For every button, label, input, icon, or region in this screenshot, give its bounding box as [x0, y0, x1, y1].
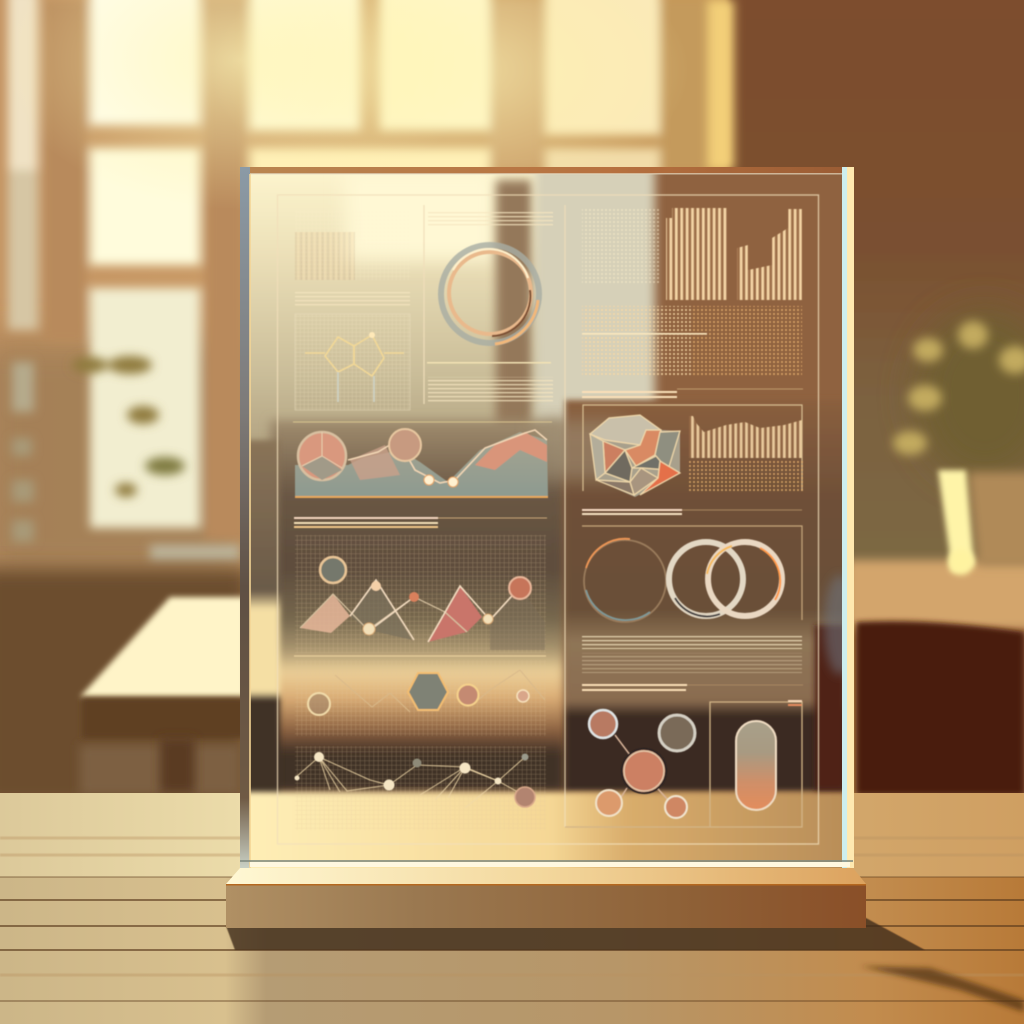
ring: thin outline [584, 540, 666, 622]
inner outline and column divider [278, 195, 818, 844]
right lower: molecule nodes [589, 710, 695, 818]
right top: wide dotted band [582, 306, 802, 376]
left middle: heading lines [294, 517, 547, 528]
right lower: pill card [565, 700, 802, 827]
potted plant on right [893, 310, 1024, 575]
left middle: lower grid panel with shapes [294, 656, 546, 736]
chart circle middle [389, 429, 421, 461]
right top: dotted block [582, 209, 660, 285]
background plant behind left window [12, 356, 240, 561]
left top: ring [441, 245, 539, 344]
left table in background [80, 597, 247, 793]
left: area chart with circles [293, 422, 552, 497]
right middle: polyhedron gem card [583, 405, 802, 497]
background: blurred room with window [0, 0, 1024, 808]
left top: text-line blocks [427, 210, 553, 403]
stand shadow on table [226, 918, 1024, 1012]
wooden table top [0, 793, 1024, 1024]
left lower: network grid panel [294, 746, 546, 830]
panel graphics [278, 195, 818, 844]
panel: glass tint and light through glass [250, 174, 842, 868]
wooden base of stand [226, 868, 866, 928]
right table and chair in background [846, 560, 1024, 795]
right middle: small bars and dots [689, 416, 803, 491]
right lower: heading lines [582, 509, 802, 515]
right top: bar chart two [737, 209, 802, 300]
left top: molecule diagram [295, 314, 410, 410]
right lower: text lines [582, 634, 803, 691]
chart nodes [424, 475, 458, 487]
right lower: rings card [582, 526, 802, 622]
ring: linked pair [669, 542, 782, 616]
chart markers [320, 557, 531, 635]
left middle: grid line chart [295, 535, 546, 653]
chart circle left [298, 432, 346, 480]
right middle: heading lines [582, 389, 803, 398]
glass frame edges [240, 167, 854, 868]
right top: bar chart one [666, 208, 727, 300]
glass panel [230, 160, 870, 882]
left top: dotted bar block [295, 210, 410, 306]
